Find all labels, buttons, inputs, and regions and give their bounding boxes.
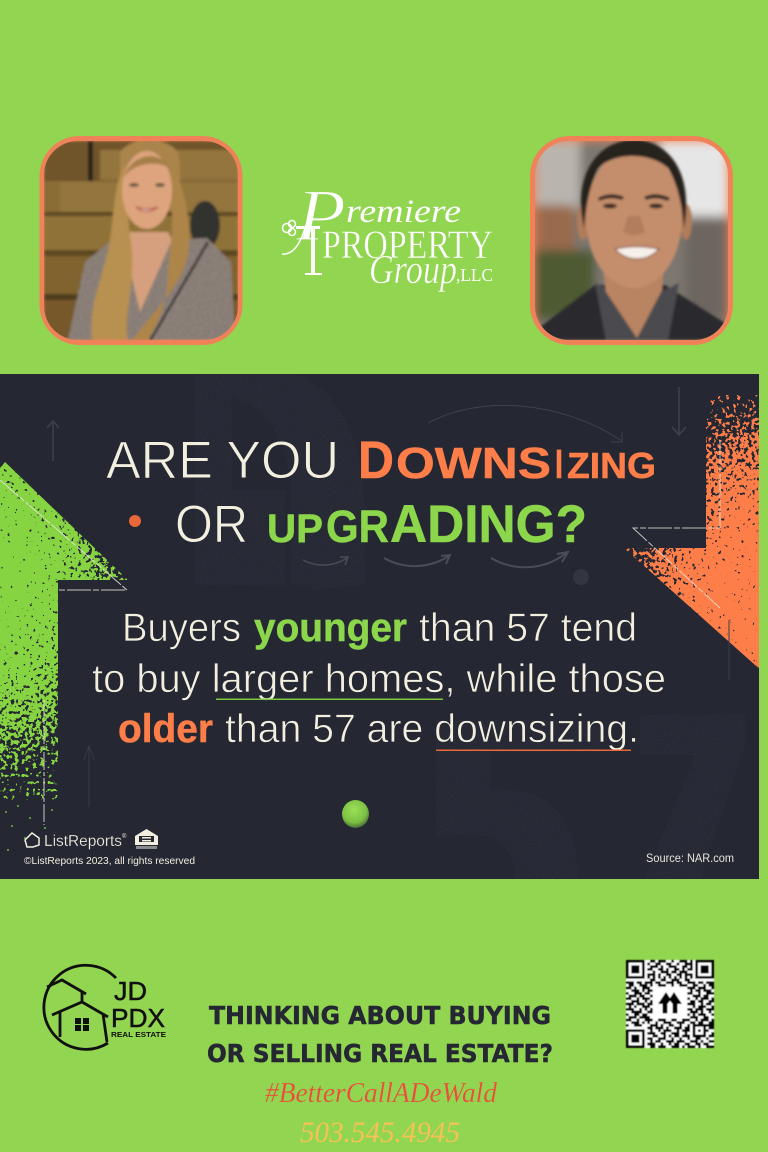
title: OR xyxy=(175,495,248,554)
small background arrows xyxy=(47,387,686,807)
ListReports logo and copyright: ® xyxy=(122,833,127,840)
body text: Buyers xyxy=(122,606,241,650)
title: ZING xyxy=(567,445,656,486)
body text xyxy=(92,606,666,751)
logo: Premiere Property Group: PROPERTY xyxy=(322,222,493,267)
title: ADING? xyxy=(390,495,587,554)
call to action heading: THINKING ABOUT BUYING xyxy=(209,1001,551,1030)
ghost numerals background xyxy=(195,375,745,879)
logo: Premiere Property Group: ,LLC xyxy=(456,265,493,285)
ListReports logo and copyright xyxy=(24,829,195,867)
body text: than 57 are downsizing. xyxy=(225,707,639,751)
source note: Source: NAR.com xyxy=(646,853,734,865)
ListReports logo and copyright: ListReports xyxy=(44,833,122,850)
hashtag: #BetterCallADeWald xyxy=(265,1077,497,1109)
call to action heading xyxy=(207,1001,553,1068)
green up arrow with dissolve xyxy=(0,462,128,851)
call to action heading: OR SELLING REAL ESTATE? xyxy=(207,1039,553,1068)
body text: than 57 tend xyxy=(419,606,637,650)
title: GR xyxy=(326,501,389,552)
decorative dots xyxy=(129,515,589,828)
title: I xyxy=(555,441,563,487)
title: D xyxy=(358,431,394,490)
logo: Premiere Property Group xyxy=(282,175,493,292)
title: ARE YOU xyxy=(106,431,339,490)
JD PDX Real Estate logo: REAL ESTATE xyxy=(111,1030,166,1039)
JD PDX Real Estate logo xyxy=(44,965,166,1049)
body text: to buy larger homes, while those xyxy=(92,657,666,701)
orange down arrow with dissolve xyxy=(626,395,759,680)
title xyxy=(106,441,654,543)
body text: older xyxy=(118,707,213,751)
body text: younger xyxy=(254,606,407,650)
phone number: 503.545.4945 xyxy=(300,1116,460,1149)
QR code xyxy=(626,960,714,1048)
dark infographic panel xyxy=(0,374,759,879)
JD PDX Real Estate logo: JD xyxy=(114,976,147,1006)
title: OWNS xyxy=(396,439,551,488)
logo: Premiere Property Group: Group xyxy=(369,246,457,292)
photo: man agent xyxy=(530,136,733,345)
logo: Premiere Property Group: P xyxy=(295,175,346,257)
photo: woman agent xyxy=(40,136,242,345)
title: UP xyxy=(267,507,323,551)
JD PDX Real Estate logo: PDX xyxy=(111,1003,165,1033)
logo: Premiere Property Group: remiere xyxy=(346,194,461,230)
ListReports logo and copyright: ©ListReports 2023, all rights reserved xyxy=(24,856,195,867)
